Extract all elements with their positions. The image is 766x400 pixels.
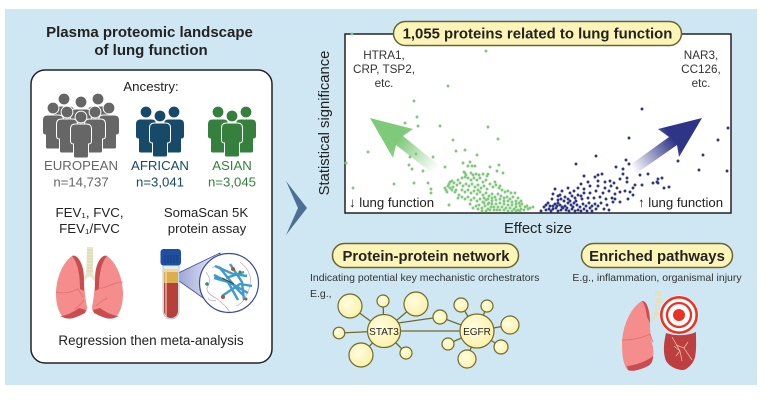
icon: lungs: [56, 247, 123, 319]
heading pill: 1,055 proteins: 1,055 proteins related to lung function: [403, 26, 672, 42]
label: increased lung function: ↑ lung function: [638, 195, 723, 210]
text: regression then meta-analysis: Regression then meta-analysis: [58, 333, 244, 348]
arrow: green decreasing: [370, 118, 441, 174]
axis label: y: Statistical significance: [317, 51, 333, 195]
heading pill: protein-protein network: [332, 244, 518, 268]
label: right proteins: NAR3,: [684, 49, 718, 62]
arrow: blue increasing: [630, 118, 702, 173]
text: pathways description: E.g., inflammation, organismal injury: [572, 272, 742, 284]
text: somascan assay: SomaScan 5K: [164, 205, 248, 220]
panel: volcano plot: [345, 34, 731, 213]
node label: EGFR: EGFR: [463, 327, 491, 338]
text: somascan assay: protein assay: [168, 221, 247, 236]
label: left proteins: HTRA1,: [363, 49, 405, 62]
label: right proteins: etc.: [692, 77, 710, 90]
axis label: x: Effect size: [504, 221, 572, 237]
heading pill: enriched pathways: Enriched pathways: [589, 249, 725, 265]
text: network description: E.g.,: [310, 288, 332, 300]
scatter: blue points: [541, 109, 728, 211]
chart: protein network: [333, 292, 519, 368]
heading pill: protein-protein network: Protein-protein network: [343, 249, 510, 265]
label: asian: n=3,045: [208, 174, 256, 190]
heading: plasma proteomic landscape: Plasma proteomic landscape: [46, 24, 253, 41]
ancestry label: Ancestry:: [123, 79, 179, 94]
label: decreased lung function: ↓ lung function: [349, 195, 434, 210]
node label: STAT3: STAT3: [369, 327, 399, 338]
panel: study design: [31, 70, 272, 363]
label: african: AFRICAN: [131, 158, 189, 173]
text: lung function measures: FEV₁, FVC,: [55, 205, 124, 220]
label: european: EUROPEAN: [44, 158, 118, 173]
heading pill: enriched pathways: [582, 244, 732, 268]
arrow: chevron: [286, 181, 307, 235]
heading pill: 1,055 proteins: [394, 22, 682, 46]
label: left proteins: CRP, TSP2,: [353, 63, 415, 76]
text: network description: Indicating potential key mechanistic orchestrators: [310, 272, 539, 284]
label: left proteins: etc.: [375, 77, 393, 90]
icon: european group: [42, 93, 120, 158]
text: lung function measures: FEV₁/FVC: [59, 221, 120, 236]
label: european: n=14,737: [53, 174, 109, 190]
label: african: n=3,041: [136, 174, 184, 190]
heading: plasma proteomic landscape: of lung function: [94, 42, 208, 59]
label: asian: ASIAN: [212, 158, 252, 173]
label: right proteins: CC126,: [681, 63, 721, 76]
icon: asian group: [208, 106, 256, 157]
icon: inflamed lungs with target: [622, 291, 698, 371]
scatter: green points: [346, 34, 533, 211]
icon: african group: [136, 106, 184, 157]
icon: blood tube with protein magnifier: [160, 249, 258, 319]
